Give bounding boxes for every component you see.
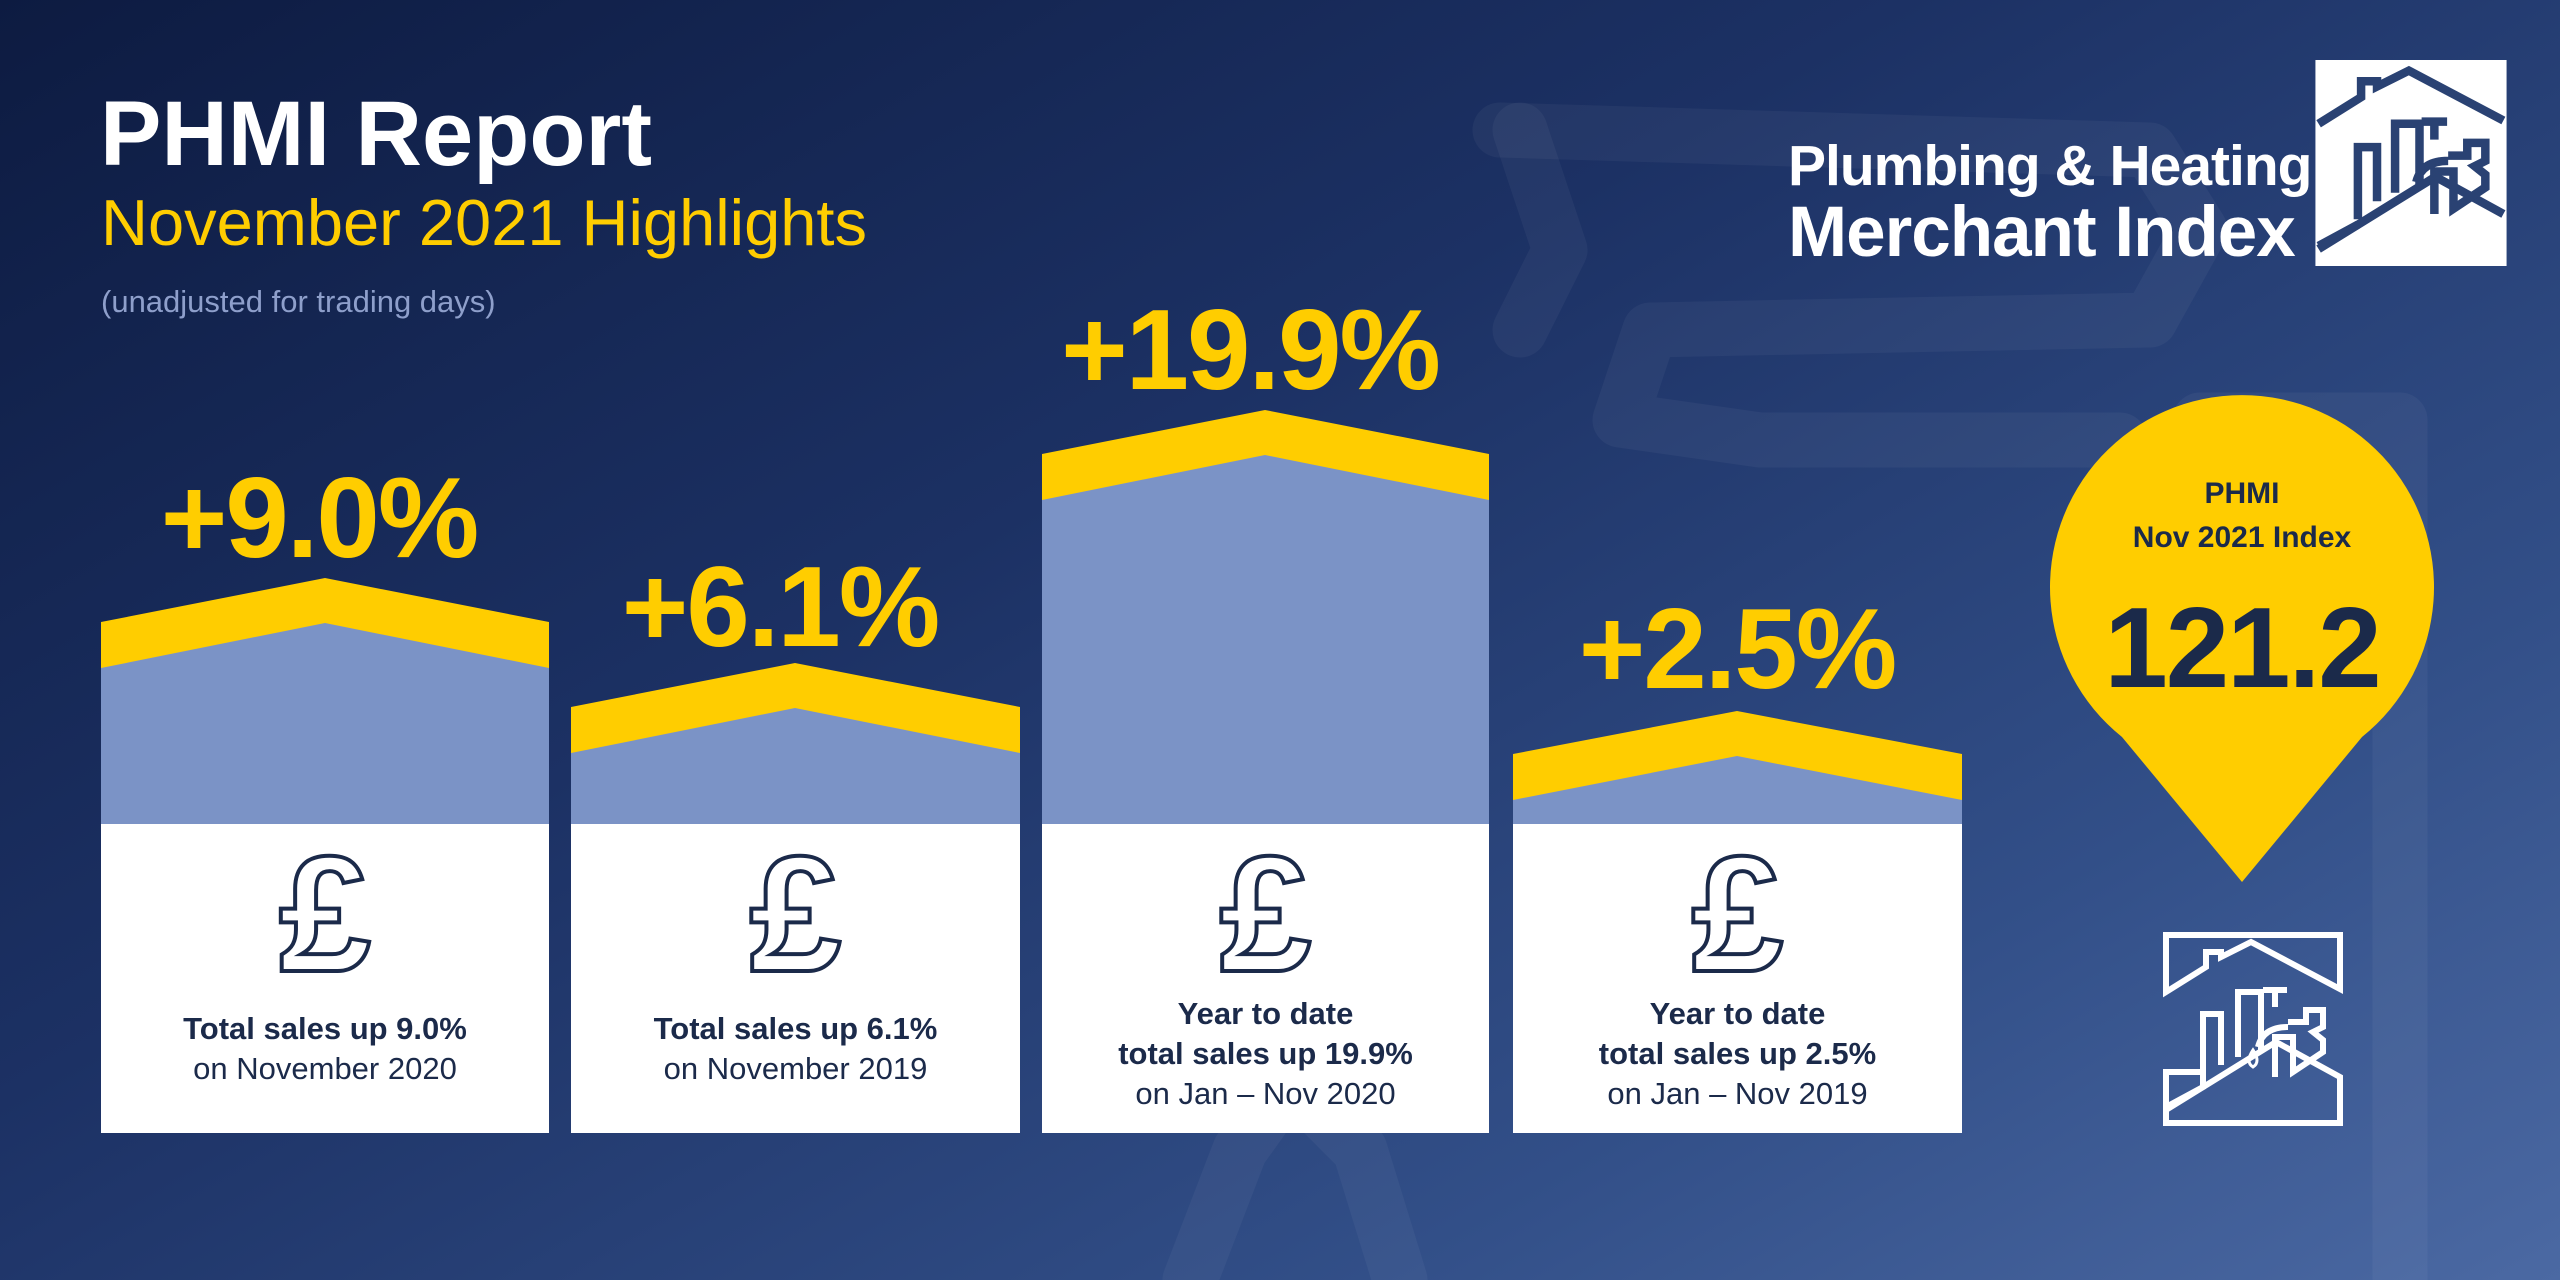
card 4 (1513, 824, 1962, 1133)
caption 3: Year to date (1178, 996, 1353, 1031)
caption 1: on November 2020 (193, 1051, 457, 1086)
logo (1788, 60, 2507, 272)
caption 4: on Jan – Nov 2019 (1607, 1076, 1868, 1111)
caption 2: Total sales up 6.1% (654, 1011, 937, 1046)
bar 1 (101, 578, 549, 824)
logo text (1788, 134, 2312, 272)
caption 1 (183, 1011, 467, 1086)
index pin (2050, 395, 2434, 882)
logo icon (2315, 60, 2507, 266)
caption 4 (1599, 996, 1876, 1111)
caption 3 (1118, 996, 1413, 1111)
pin label: Nov 2021 Index (2133, 521, 2351, 554)
value +19.9%: +19.9% (1061, 287, 1439, 414)
card 1 (101, 824, 549, 1133)
bar 3 (1042, 410, 1489, 824)
value +9.0%: +9.0% (161, 455, 477, 582)
bar 2 (571, 663, 1020, 824)
pin label: PHMI (2204, 477, 2280, 510)
title: PHMI Report (100, 83, 652, 185)
subtitle: November 2021 Highlights (101, 186, 867, 259)
logo text: Plumbing & Heating (1788, 134, 2312, 198)
bar 4 (1513, 711, 1962, 824)
caption 2 (654, 1011, 937, 1086)
caption 1: Total sales up 9.0% (183, 1011, 467, 1046)
card 3 (1042, 824, 1489, 1133)
caption 2: on November 2019 (664, 1051, 927, 1086)
caption 4: Year to date (1650, 996, 1825, 1031)
pin value: 121.2 (2104, 585, 2380, 712)
caption 3: total sales up 19.9% (1118, 1036, 1413, 1071)
value +2.5%: +2.5% (1579, 586, 1895, 713)
value +6.1%: +6.1% (622, 544, 938, 671)
pin label (2133, 477, 2351, 554)
caption 3: on Jan – Nov 2020 (1135, 1076, 1396, 1111)
small logo icon (2163, 932, 2343, 1126)
note: (unadjusted for trading days) (101, 284, 496, 319)
logo text: Merchant Index (1788, 193, 2295, 272)
caption 4: total sales up 2.5% (1599, 1036, 1876, 1071)
card 2 (571, 824, 1020, 1133)
